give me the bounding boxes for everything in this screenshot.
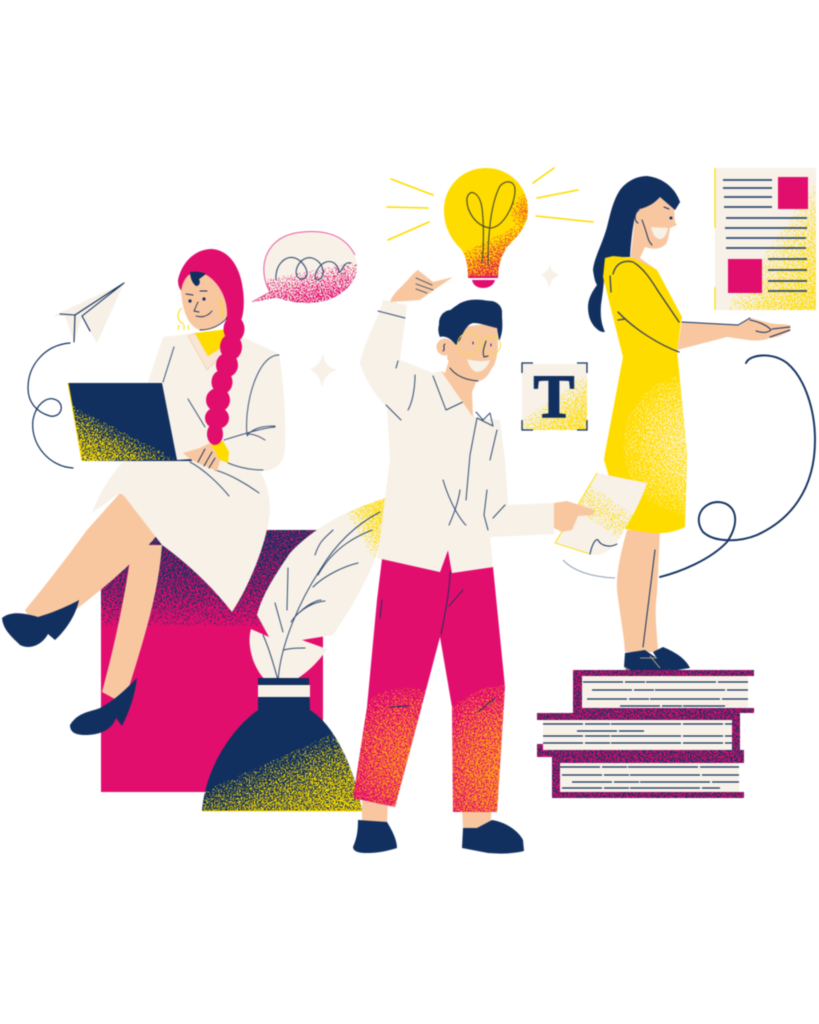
face features <box>635 207 669 245</box>
arm <box>677 318 790 350</box>
pointing hand <box>390 270 453 302</box>
arm lines <box>682 318 790 337</box>
legs <box>617 530 660 652</box>
shoes <box>353 820 524 854</box>
woman with braid <box>2 249 285 735</box>
face lines <box>443 341 491 381</box>
hair <box>438 300 502 345</box>
poster page <box>715 168 816 310</box>
shirt lines <box>378 311 505 530</box>
type tool icon <box>522 363 587 431</box>
ink bottle <box>202 678 362 811</box>
image block: bottom <box>728 259 762 293</box>
man pointing <box>353 270 554 854</box>
sparkle: left <box>310 353 337 388</box>
shoe: crossed leg <box>2 600 79 647</box>
shoe: lower leg <box>70 678 137 735</box>
hair <box>190 272 206 286</box>
book: middle <box>537 713 740 750</box>
laptop <box>68 383 192 461</box>
hair front <box>636 187 680 210</box>
neck and face <box>630 197 677 270</box>
hair back <box>588 176 680 332</box>
light bulb <box>444 168 528 288</box>
light rays <box>387 168 593 240</box>
trousers <box>353 550 505 812</box>
leg: crossed <box>25 493 165 626</box>
raised shirt sleeve and body <box>360 300 554 573</box>
hijab <box>178 249 244 322</box>
neck <box>195 329 228 356</box>
icon: quill feather <box>250 497 389 683</box>
paper sheet <box>555 473 647 555</box>
mouth <box>651 227 668 239</box>
book: top <box>573 670 754 713</box>
face <box>181 272 227 330</box>
faint curve beneath paper <box>563 560 615 578</box>
neck <box>441 357 478 417</box>
braid <box>205 316 244 445</box>
text lines <box>723 180 807 291</box>
sweater <box>148 331 285 471</box>
leg line <box>643 550 655 647</box>
finger lines <box>416 278 433 293</box>
face features <box>186 291 227 330</box>
skirt <box>92 455 270 612</box>
stack of books <box>537 670 754 798</box>
icon: paper plane <box>53 283 124 343</box>
sweater collar <box>188 333 224 370</box>
hand <box>183 443 220 471</box>
type tool icon: T <box>534 364 574 431</box>
head <box>447 323 498 381</box>
cuff <box>210 441 229 463</box>
man's hand <box>554 501 595 532</box>
dress <box>603 256 687 533</box>
mouth <box>467 359 490 372</box>
eye <box>670 216 672 220</box>
dashed flight curve: left <box>28 343 73 468</box>
image block: top <box>778 177 808 209</box>
speech bubble <box>252 232 357 303</box>
magenta square backdrop <box>101 530 323 792</box>
ear <box>436 338 454 356</box>
ankles <box>362 800 492 830</box>
book: bottom <box>537 750 744 798</box>
earrings <box>178 300 224 330</box>
sweater creases <box>163 347 279 496</box>
dashed flight curve: right <box>660 355 815 577</box>
woman in yellow dress <box>588 176 790 680</box>
shoes <box>624 647 690 680</box>
hand lines <box>198 449 215 468</box>
leg: lower <box>102 545 162 704</box>
sparkle: centre <box>541 263 559 288</box>
glasses <box>458 333 501 355</box>
paper held by man <box>554 473 647 555</box>
